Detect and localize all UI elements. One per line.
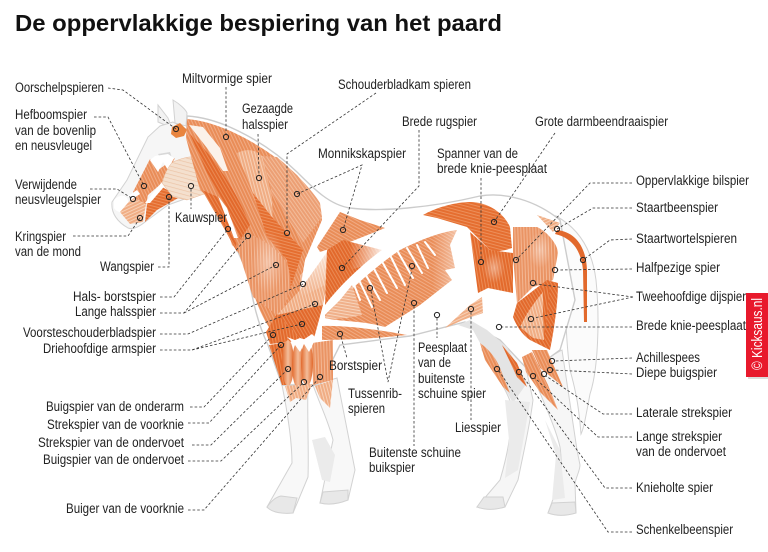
label: Buigspier van de onderarm: Buigspier van de onderarm <box>46 399 184 414</box>
forelock muscle <box>171 123 187 138</box>
label: Halfpezige spier: Halfpezige spier <box>636 260 720 275</box>
label: Hefboomspier: Hefboomspier <box>15 107 87 122</box>
label: Driehoofdige armspier <box>43 301 318 356</box>
far hind leg <box>530 350 580 513</box>
label: Buitenste schuine buikspier: Buitenste schuine <box>369 445 461 460</box>
label: Tussenribspieren <box>348 263 415 416</box>
label: Peesplaat van de buitenste schuine spier <box>418 312 486 401</box>
label: Driehoofdige armspier: Driehoofdige armspier <box>43 341 156 356</box>
label: Monnikskapspier <box>294 146 406 233</box>
front legs <box>267 378 355 513</box>
label: Spanner van de brede knie-peesplaat: brede knie-peesplaat <box>437 161 547 176</box>
label: Laterale strekspier: Laterale strekspier <box>636 405 732 420</box>
face muscles <box>120 154 180 224</box>
label: Peesplaat van de buitenste schuine spier: buitenste <box>418 371 465 386</box>
label: Kringspier van de mond <box>15 215 143 259</box>
label: Tweehoofdige dijspier <box>528 280 746 322</box>
label: Miltvormige spier <box>182 71 272 140</box>
label: Spanner van de brede knie-peesplaat <box>437 146 547 265</box>
label: Oorschelpspieren: Oorschelpspieren <box>15 80 104 95</box>
label: Knieholte spier <box>516 369 713 495</box>
label: Miltvormige spier: Miltvormige spier <box>182 71 272 86</box>
label: Schenkelbeenspier: Schenkelbeenspier <box>636 522 733 537</box>
label: Tussenribspieren: Tussenrib- <box>348 386 402 401</box>
label: Hefboomspier: van de bovenlip <box>15 123 96 138</box>
rib muscles <box>325 228 458 327</box>
title: De oppervlakkige bespiering van het paard <box>15 10 502 36</box>
Borstspier muscle <box>322 326 407 340</box>
label: Brede rugspier: Brede rugspier <box>402 114 477 129</box>
label: Wangspier <box>100 194 172 274</box>
flank shading <box>458 320 527 403</box>
label: Achillespees <box>549 350 700 365</box>
Kauwspier muscle <box>162 157 208 200</box>
label: Hals- borstspier <box>73 226 231 304</box>
label: Staartbeenspier: Staartbeenspier <box>636 200 718 215</box>
label: Halfpezige spier <box>552 260 720 275</box>
label: Peesplaat van de buitenste schuine spier: schuine spier <box>418 386 486 401</box>
label: Hefboomspier <box>15 107 147 189</box>
tail <box>556 216 598 434</box>
label: Liesspier: Liesspier <box>455 420 501 435</box>
label: Buitenste schuine buikspier <box>369 300 461 475</box>
label: Lange strekspier van de ondervoet: van de ondervoet <box>636 444 726 459</box>
label: Buigspier van de ondervoet: Buigspier van de ondervoet <box>43 452 184 467</box>
label: Brede knie-peesplaat <box>496 318 746 333</box>
Brede rugspier muscle <box>325 240 382 305</box>
label: Tweehoofdige dijspier: Tweehoofdige dijspier <box>636 289 746 304</box>
label: Achillespees: Achillespees <box>636 350 700 365</box>
label: Buigspier van de onderarm <box>46 332 276 414</box>
credit badge <box>746 293 768 379</box>
label: Verwijdende neusvleugelspier <box>15 177 136 207</box>
label: Liesspier <box>455 306 501 435</box>
label: Tussenribspieren: spieren <box>348 401 385 416</box>
muzzle highlight <box>114 196 128 212</box>
hip muscles <box>423 202 587 350</box>
shoulder muscles <box>266 252 327 344</box>
label: Oorschelpspieren <box>15 80 179 132</box>
forearm muscles <box>269 334 333 408</box>
label: Brede rugspier <box>339 114 477 271</box>
body silhouette <box>187 116 575 385</box>
lower hind muscles <box>480 343 563 410</box>
label: Buigspier van de ondervoet <box>43 379 307 467</box>
label: Lange halsspier <box>75 233 279 319</box>
label: Strekspier van de ondervoet: Strekspier van de ondervoet <box>38 435 184 450</box>
label: Laterale strekspier <box>541 371 732 420</box>
label: Verwijdende neusvleugelspier: Verwijdende <box>15 177 77 192</box>
label: Schouderbladkam spieren: Schouderbladkam spieren <box>338 77 471 92</box>
label: Schenkelbeenspier <box>494 366 733 537</box>
label: Hals- borstspier: Hals- borstspier <box>73 289 156 304</box>
label: Kringspier van de mond: van de mond <box>15 244 81 259</box>
label: Lange strekspier van de ondervoet: Lange strekspier <box>636 429 722 444</box>
label: Gezaagde halsspier <box>242 101 293 181</box>
eye <box>158 152 172 164</box>
neck muscles <box>186 119 322 335</box>
label: Staartwortelspieren: Staartwortelspieren <box>636 231 737 246</box>
label: Oppervlakkige bilspier <box>513 173 749 263</box>
label: Buitenste schuine buikspier: buikspier <box>369 460 415 475</box>
head <box>112 122 204 229</box>
label: Diepe buigspier: Diepe buigspier <box>636 365 717 380</box>
label: Strekspier van de ondervoet <box>38 366 291 450</box>
label: Lange strekspier van de ondervoet <box>530 373 726 459</box>
label: Peesplaat van de buitenste schuine spier: Peesplaat <box>418 340 467 355</box>
label: Staartbeenspier <box>554 200 718 232</box>
label: Buiger van de voorknie: Buiger van de voorknie <box>66 501 184 516</box>
ears <box>158 100 187 128</box>
label: Strekspier van de voorknie: Strekspier van de voorknie <box>47 417 184 432</box>
label: Grote darmbeendraaispier: Grote darmbeendraaispier <box>535 114 668 129</box>
label: Lange halsspier: Lange halsspier <box>75 304 156 319</box>
label: Gezaagde halsspier: halsspier <box>242 117 288 132</box>
label: Buiger van de voorknie <box>66 374 323 516</box>
label: Oppervlakkige bilspier: Oppervlakkige bilspier <box>636 173 749 188</box>
horse illustration <box>112 100 598 515</box>
label: Brede knie-peesplaat: Brede knie-peesplaat <box>636 318 746 333</box>
label: Borstspier: Borstspier <box>329 358 382 373</box>
label: Gezaagde halsspier: Gezaagde <box>242 101 293 116</box>
hind leg shading <box>312 400 565 500</box>
label: Grote darmbeendraaispier <box>491 114 668 225</box>
label: Monnikskapspier: Monnikskapspier <box>318 146 406 161</box>
near hind leg <box>477 350 533 507</box>
label: Strekspier van de voorknie <box>47 342 284 432</box>
label: Borstspier <box>329 331 382 373</box>
label: Voorsteschouderbladspier: Voorsteschouderbladspier <box>23 325 156 340</box>
label: Kringspier van de mond: Kringspier <box>15 229 66 244</box>
label: Kauwspier: Kauwspier <box>175 210 227 225</box>
label: Diepe buigspier <box>547 365 717 380</box>
label: Wangspier: Wangspier <box>100 259 154 274</box>
label: Verwijdende neusvleugelspier: neusvleugelspier <box>15 192 101 207</box>
hooves <box>267 490 576 515</box>
label: Hefboomspier: en neusvleugel <box>15 138 92 153</box>
label: Voorsteschouderbladspier <box>23 281 306 340</box>
label: Schouderbladkam spieren <box>284 77 471 236</box>
label: Peesplaat van de buitenste schuine spier: van de <box>418 355 451 370</box>
label: Kauwspier <box>175 183 227 225</box>
label: Spanner van de brede knie-peesplaat: Spanner van de <box>437 146 518 161</box>
label: Knieholte spier: Knieholte spier <box>636 480 713 495</box>
credit badge: © Kicksaus.nl <box>749 298 766 370</box>
label: Staartwortelspieren <box>580 231 737 263</box>
Monnikskapspier muscle <box>317 212 385 252</box>
